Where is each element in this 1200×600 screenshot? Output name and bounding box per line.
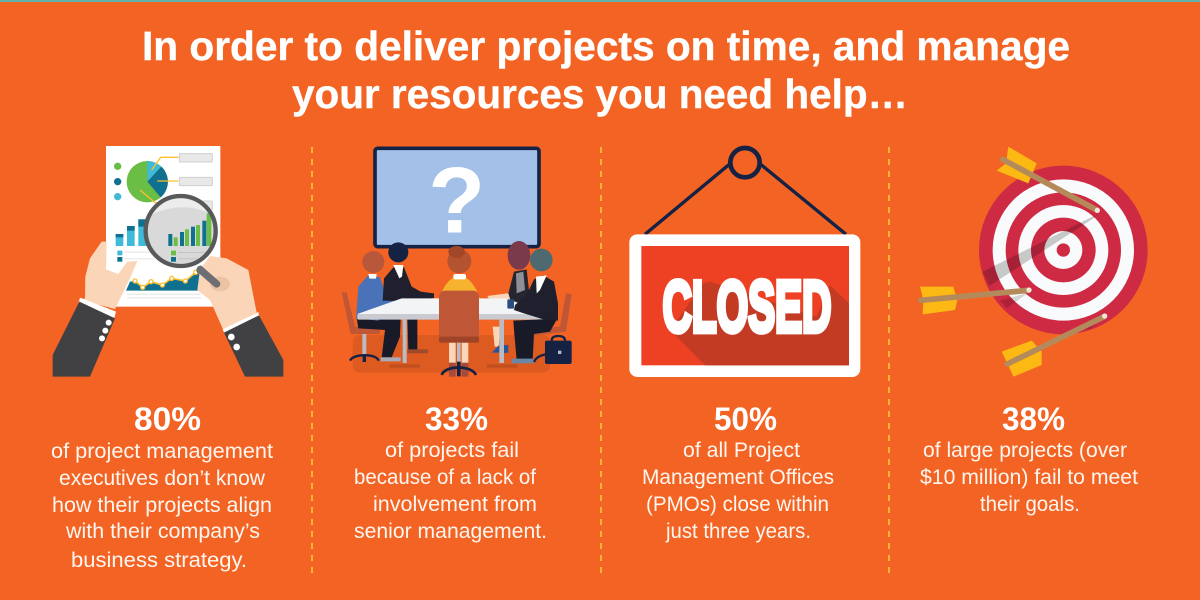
arrow bottom	[1002, 313, 1107, 377]
stat: 33%: 33%	[425, 401, 488, 437]
title	[142, 23, 1070, 117]
report page	[106, 146, 220, 307]
arrow top	[997, 147, 1100, 213]
magnifying glass	[144, 194, 218, 274]
presentation screen: ?	[428, 148, 485, 252]
woman seated on far side	[487, 241, 530, 353]
pie chart	[127, 161, 168, 202]
floor shadow	[353, 335, 550, 373]
table	[357, 298, 546, 368]
stat: 38%	[920, 401, 1138, 516]
presentation screen	[375, 148, 539, 252]
arrow left	[920, 287, 1032, 314]
title: In order to deliver projects on time, and manage	[142, 23, 1070, 69]
stat: 50%: 50%	[714, 401, 777, 437]
icon: target with arrows	[920, 147, 1148, 377]
man in black suit on right	[507, 249, 558, 363]
woman in yellow on centre chair	[439, 246, 480, 377]
man in black suit	[383, 242, 434, 353]
icon: business meeting in front of a screen	[342, 148, 572, 377]
stat: 50%: of all Project	[683, 439, 800, 462]
stat: 80%	[51, 401, 273, 572]
stat: 50%: Management Offices	[642, 466, 834, 489]
stat: 80%: 80%	[134, 401, 201, 437]
stat: 33%: because of a lack of	[354, 466, 536, 489]
sign board	[629, 234, 860, 377]
man in blue jumper	[356, 251, 407, 361]
stat: 38%: 38%	[1002, 401, 1065, 437]
stat: 80%: with their company’s	[65, 520, 260, 543]
right chair	[533, 293, 572, 362]
icon: closed sign	[629, 148, 860, 377]
legend dots	[114, 163, 121, 200]
stat: 33%: of projects fail	[385, 439, 519, 462]
stat: 80%: business strategy.	[71, 549, 247, 572]
icon: hands holding report with magnifying glass	[53, 146, 283, 377]
stat: 38%: $10 million) fail to meet	[920, 466, 1138, 489]
stat: 50%: (PMOs) close within	[646, 493, 829, 516]
left chair	[342, 292, 381, 362]
stat: 38%: their goals.	[980, 493, 1080, 516]
stat: 33%: involvement from	[373, 493, 537, 516]
stat: 33%	[354, 401, 547, 543]
bar chart	[116, 214, 157, 246]
hanging cord and ring	[645, 148, 846, 234]
area chart	[126, 270, 203, 298]
left hand and sleeve	[53, 242, 137, 377]
sign board: CLOSED	[663, 268, 831, 348]
stat: 80%: executives don’t know	[59, 467, 266, 490]
stat: 80%: how their projects align	[52, 494, 272, 517]
briefcase	[545, 336, 572, 364]
right hand and sleeve	[197, 256, 283, 377]
stat: 50%: just three years.	[665, 520, 811, 543]
stat: 33%: senior management.	[354, 520, 547, 543]
title: your resources you need help…	[292, 71, 908, 117]
stat: 50%	[642, 401, 834, 543]
stat: 80%: of project management	[51, 440, 273, 463]
target	[979, 166, 1148, 334]
stat: 38%: of large projects (over	[923, 439, 1127, 462]
